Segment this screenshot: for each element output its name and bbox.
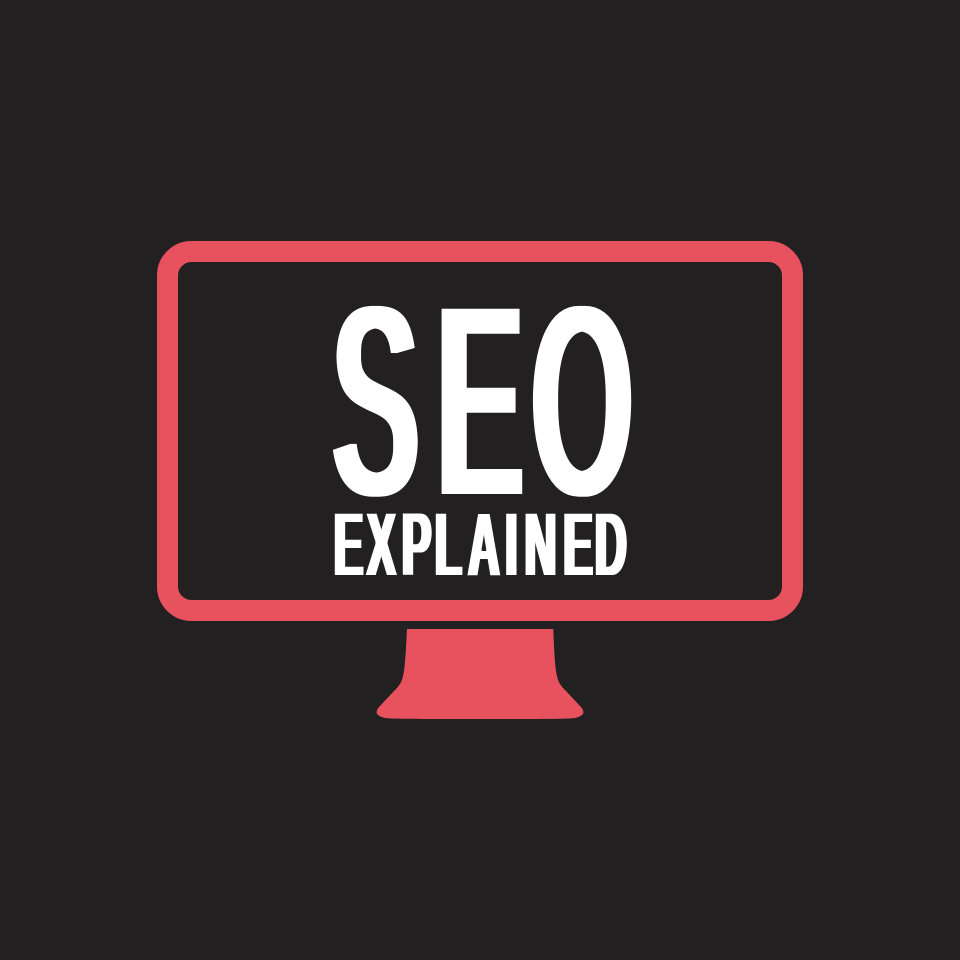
title: SEO: SEO [331, 247, 634, 557]
monitor screen frame [168, 252, 792, 610]
subtitle: EXPLAINED: EXPLAINED [334, 494, 627, 596]
icon: computer monitor [168, 252, 792, 719]
monitor stand [377, 629, 583, 719]
